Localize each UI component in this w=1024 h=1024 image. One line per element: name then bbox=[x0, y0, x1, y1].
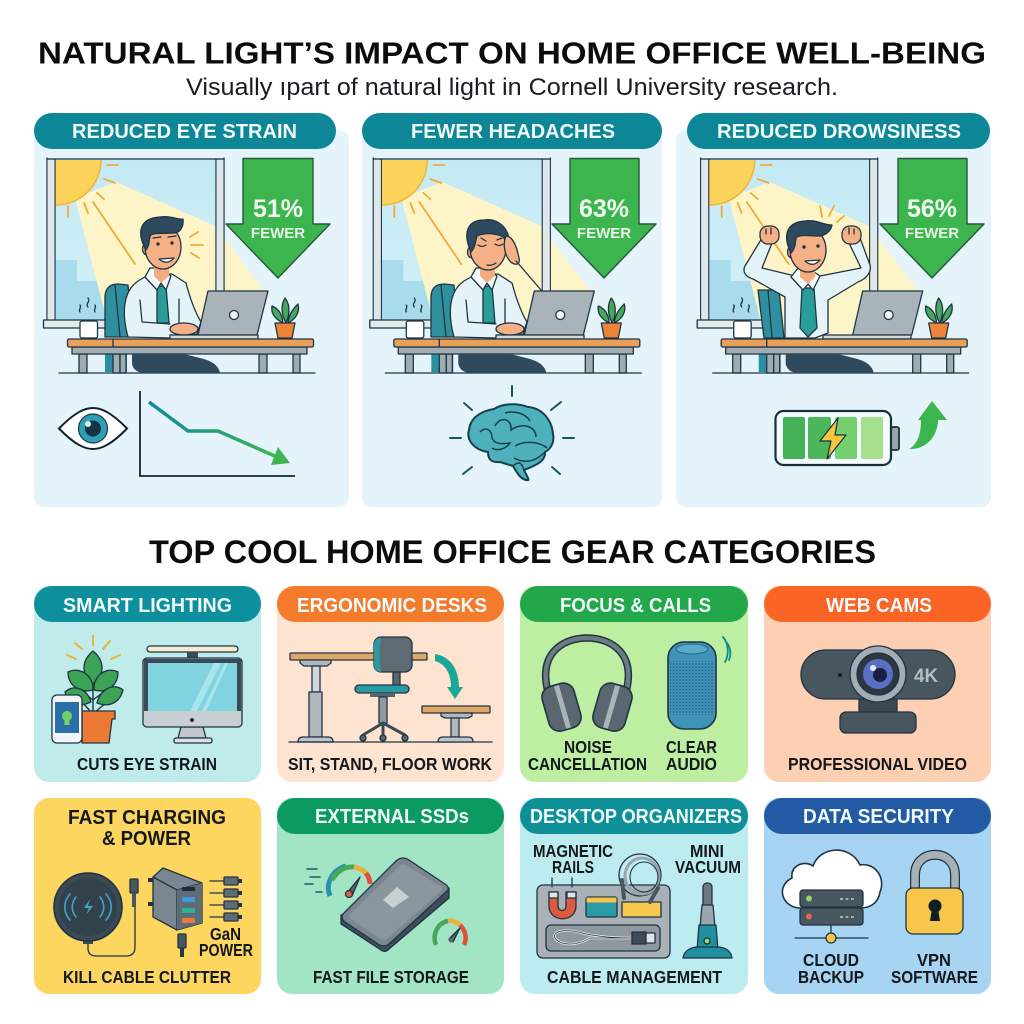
icon: brain bbox=[450, 386, 574, 480]
tile heading: DATA SECURITY bbox=[803, 806, 955, 828]
labels: NOISE bbox=[564, 737, 612, 757]
tile heading: EXTERNAL SSDs bbox=[315, 806, 469, 828]
down arrow: 51% fewer: FEWER bbox=[251, 225, 305, 242]
icon: teal arrow bbox=[435, 654, 463, 699]
labels bbox=[533, 841, 741, 877]
down arrow: 56% fewer bbox=[880, 158, 984, 278]
panel: fewer headaches bbox=[337, 113, 662, 507]
label: SIT, STAND, FLOOR WORK bbox=[288, 754, 492, 774]
icon: portable SSD bbox=[341, 858, 449, 951]
tile heading: FOCUS & CALLS bbox=[560, 595, 711, 617]
labels: AUDIO bbox=[666, 754, 717, 774]
icon: eye bbox=[59, 408, 127, 449]
tile heading bbox=[277, 798, 504, 834]
labels: MINI bbox=[690, 841, 724, 861]
tile: fast charging and power bbox=[34, 798, 261, 994]
tile heading: SMART LIGHTING bbox=[63, 595, 232, 617]
icon: plant with light rays bbox=[52, 636, 123, 743]
line chart: decline bbox=[140, 391, 295, 476]
icon: GaN charger and cables bbox=[148, 868, 242, 957]
subtitle: Visually ıpart of natural light in Cornell University research. bbox=[186, 74, 838, 101]
labels: CLEAR bbox=[666, 737, 717, 757]
tile heading: & POWER bbox=[102, 827, 191, 850]
icon: up arrow bbox=[909, 401, 947, 449]
icon: speedometers bbox=[305, 866, 466, 945]
person celebrating bbox=[744, 206, 870, 338]
labels bbox=[199, 924, 253, 960]
tile heading bbox=[520, 798, 748, 834]
panel heading: reduced eye strain bbox=[34, 113, 336, 149]
tile heading bbox=[68, 806, 226, 850]
icon: monitor with light bar bbox=[143, 646, 242, 743]
panel heading: fewer headaches bbox=[362, 113, 662, 149]
4K mark: 4K bbox=[914, 666, 938, 687]
labels: RAILS bbox=[552, 857, 594, 877]
label: FAST FILE STORAGE bbox=[313, 967, 469, 987]
down arrow: 63% fewer: 63% bbox=[579, 195, 629, 223]
panel heading: reduced drowsiness: REDUCED DROWSINESS bbox=[717, 121, 961, 143]
labels: CLOUD bbox=[803, 950, 859, 970]
icon: battery charging bbox=[776, 401, 947, 465]
labels: POWER bbox=[199, 940, 253, 960]
icon: webcam bbox=[801, 646, 955, 733]
labels: SOFTWARE bbox=[891, 967, 978, 987]
icon: mini vacuum bbox=[683, 883, 732, 958]
label: KILL CABLE CLUTTER bbox=[63, 967, 231, 987]
panel heading: reduced drowsiness bbox=[687, 113, 990, 149]
labels: VACUUM bbox=[675, 857, 741, 877]
labels bbox=[528, 737, 717, 774]
icon: smart speaker bbox=[668, 637, 730, 729]
label: CABLE MANAGEMENT bbox=[547, 967, 722, 987]
label: PROFESSIONAL VIDEO bbox=[788, 754, 967, 774]
tile: web cams bbox=[764, 586, 991, 782]
tile heading bbox=[277, 586, 504, 622]
tile heading bbox=[764, 586, 991, 622]
tile heading bbox=[34, 586, 261, 622]
person with headache bbox=[431, 220, 541, 338]
icon: organizer tray bbox=[537, 854, 670, 958]
down arrow: 63% fewer bbox=[552, 158, 656, 278]
tile heading: DESKTOP ORGANIZERS bbox=[530, 806, 742, 828]
labels: VPN bbox=[917, 950, 951, 970]
labels: CANCELLATION bbox=[528, 754, 647, 774]
down arrow: 56% fewer: 56% bbox=[907, 195, 957, 223]
down arrow: 51% fewer: 51% bbox=[253, 195, 303, 223]
down arrow: 63% fewer: FEWER bbox=[577, 225, 631, 242]
tile heading: ERGONOMIC DESKS bbox=[297, 595, 487, 617]
tile heading bbox=[764, 798, 991, 834]
panel heading: fewer headaches: FEWER HEADACHES bbox=[411, 121, 615, 143]
labels: GaN bbox=[210, 924, 241, 944]
labels: MAGNETIC bbox=[533, 841, 613, 861]
tile: desktop organizers bbox=[520, 798, 748, 994]
down arrow: 56% fewer: FEWER bbox=[905, 225, 959, 242]
labels bbox=[798, 950, 978, 987]
down arrow: 51% fewer bbox=[226, 158, 330, 278]
tile: focus and calls bbox=[520, 586, 748, 782]
icon: headphones bbox=[539, 638, 635, 734]
tile: smart lighting bbox=[34, 586, 261, 782]
panel heading: reduced eye strain: REDUCED EYE STRAIN bbox=[72, 121, 297, 143]
tile: ergonomic desks bbox=[277, 586, 504, 782]
panel: reduced eye strain bbox=[11, 113, 349, 507]
icon: cloud backup server bbox=[782, 850, 882, 943]
icon: standing desk, chair, floor desk bbox=[289, 637, 492, 742]
tile: external SSDs bbox=[277, 798, 504, 994]
icon: wireless charging pad bbox=[54, 873, 138, 956]
section heading: TOP COOL HOME OFFICE GEAR CATEGORIES bbox=[149, 534, 876, 570]
tile heading: FAST CHARGING bbox=[68, 806, 226, 829]
labels: BACKUP bbox=[798, 967, 864, 987]
label: CUTS EYE STRAIN bbox=[77, 754, 217, 774]
tile heading: WEB CAMS bbox=[826, 595, 932, 617]
icon: padlock bbox=[906, 855, 963, 934]
tile heading bbox=[520, 586, 748, 622]
panel: reduced drowsiness bbox=[665, 113, 991, 507]
tile: data security bbox=[764, 798, 991, 994]
title: NATURAL LIGHT’S IMPACT ON HOME OFFICE WELL-BEING bbox=[38, 36, 986, 70]
person working happily bbox=[105, 217, 203, 338]
